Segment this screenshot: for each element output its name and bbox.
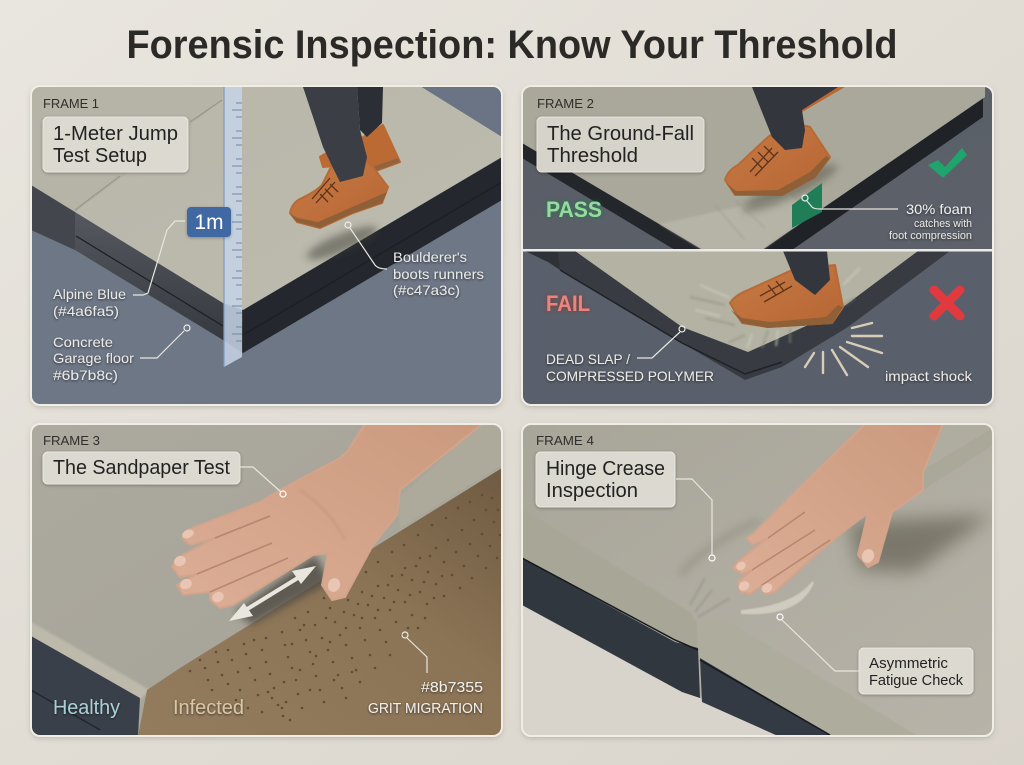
1m badge — [187, 207, 231, 237]
panel: frame 4, hinge crease inspection — [522, 424, 993, 736]
title card: Threshold — [547, 145, 638, 167]
impact lines — [805, 323, 882, 375]
mat: top surfaces — [31, 86, 502, 310]
fail label: FAIL — [546, 291, 590, 316]
callout: boots: Boulderer's — [393, 249, 467, 265]
callout: boots — [345, 222, 484, 298]
callout: crease pointer — [676, 479, 715, 561]
frame label: FRAME 3 — [43, 433, 100, 448]
scene: fail — [526, 252, 949, 380]
green compression wedge — [792, 183, 822, 228]
mat edge highlight — [31, 622, 150, 700]
title card: The Ground-Fall — [547, 123, 694, 145]
frame label: FRAME 4 — [536, 433, 594, 448]
callout: dead slap: DEAD SLAP / — [546, 351, 630, 367]
icon: hand — [733, 424, 943, 595]
panel: frame 2, ground-fall threshold — [522, 86, 993, 405]
icon: cross mark — [934, 290, 960, 316]
icon: hand — [172, 424, 482, 608]
callout: concrete floor: Garage floor — [53, 350, 134, 366]
callout: hand pointer — [240, 467, 286, 497]
scene: pass — [522, 86, 993, 250]
mat: main side wall — [75, 212, 243, 353]
boot shadow — [304, 222, 380, 264]
floor — [522, 605, 778, 736]
boot shadow — [740, 161, 839, 215]
title card — [43, 452, 240, 484]
callout: boots: boots runners — [393, 266, 484, 282]
right bevel — [820, 703, 915, 735]
frame label: FRAME 2 — [537, 96, 594, 111]
callout: alpine blue: (#4a6fa5) — [53, 303, 119, 319]
icon: front boot — [290, 160, 388, 228]
icon: rear boot — [800, 87, 845, 112]
callout: grit migration: GRIT MIGRATION — [368, 700, 483, 717]
trousers — [752, 87, 838, 150]
trousers — [783, 251, 830, 295]
callout: asymmetric fatigue check: Asymmetric — [869, 655, 948, 672]
frame label: FRAME 1 — [43, 96, 99, 111]
callout: dead slap — [546, 326, 714, 384]
infected label: Infected — [173, 697, 244, 719]
hand shadow — [848, 515, 992, 572]
grit particles — [190, 495, 500, 720]
panel: frame 1, jump test setup — [31, 86, 502, 405]
dark sides — [522, 558, 700, 698]
light pressure arc — [742, 582, 813, 613]
hand shadow — [235, 555, 330, 625]
mat: left fold side — [31, 185, 75, 250]
callout: grit migration: #8b7355 — [421, 679, 483, 696]
callout: concrete floor: #6b7b8c) — [53, 367, 118, 383]
title: Forensic Inspection: Know Your Threshold — [126, 23, 898, 67]
left bevel — [622, 590, 698, 647]
callout: grit migration — [368, 632, 483, 717]
callout: foam: foot compression — [889, 230, 972, 242]
callout: asymmetric fatigue check: Fatigue Check — [869, 672, 963, 689]
1m badge: 1m — [194, 211, 224, 234]
divider — [522, 249, 993, 252]
arrow: rub direction — [229, 566, 316, 621]
impact shock label: impact shock — [885, 368, 973, 384]
title card: Inspection — [546, 480, 638, 502]
title card — [537, 117, 704, 172]
title card: 1-Meter Jump — [53, 123, 178, 145]
icon: boot — [730, 265, 843, 328]
icon: rear boot — [320, 125, 400, 172]
callout: foam: catches with — [914, 218, 972, 230]
title card — [43, 117, 188, 172]
title card — [536, 452, 675, 507]
infected tan zone — [138, 468, 502, 736]
callout: dead slap: COMPRESSED POLYMER — [546, 368, 714, 384]
callout: boots: (#c47a3c) — [393, 282, 460, 298]
callout: alpine blue — [53, 221, 185, 319]
panel: frame 3, sandpaper test — [31, 424, 502, 736]
callout: concrete floor: Concrete — [53, 334, 113, 350]
pass label: PASS — [546, 197, 602, 222]
ruler — [224, 86, 242, 367]
callout: foam: 30% foam — [906, 201, 972, 217]
healthy label: Healthy — [53, 697, 120, 719]
title card: Hinge Crease — [546, 458, 665, 480]
icon: boot — [725, 122, 830, 196]
title card: Test Setup — [53, 145, 147, 167]
dent crease — [680, 520, 760, 575]
trousers — [303, 87, 383, 182]
icon: check mark — [928, 148, 967, 178]
callout: asymmetric fatigue check — [777, 614, 973, 694]
callout: concrete floor — [53, 325, 190, 383]
callout: alpine blue: Alpine Blue — [53, 286, 126, 302]
title card: The Sandpaper Test — [53, 457, 230, 479]
dark side wall — [31, 636, 140, 736]
callout: foam — [802, 195, 972, 242]
